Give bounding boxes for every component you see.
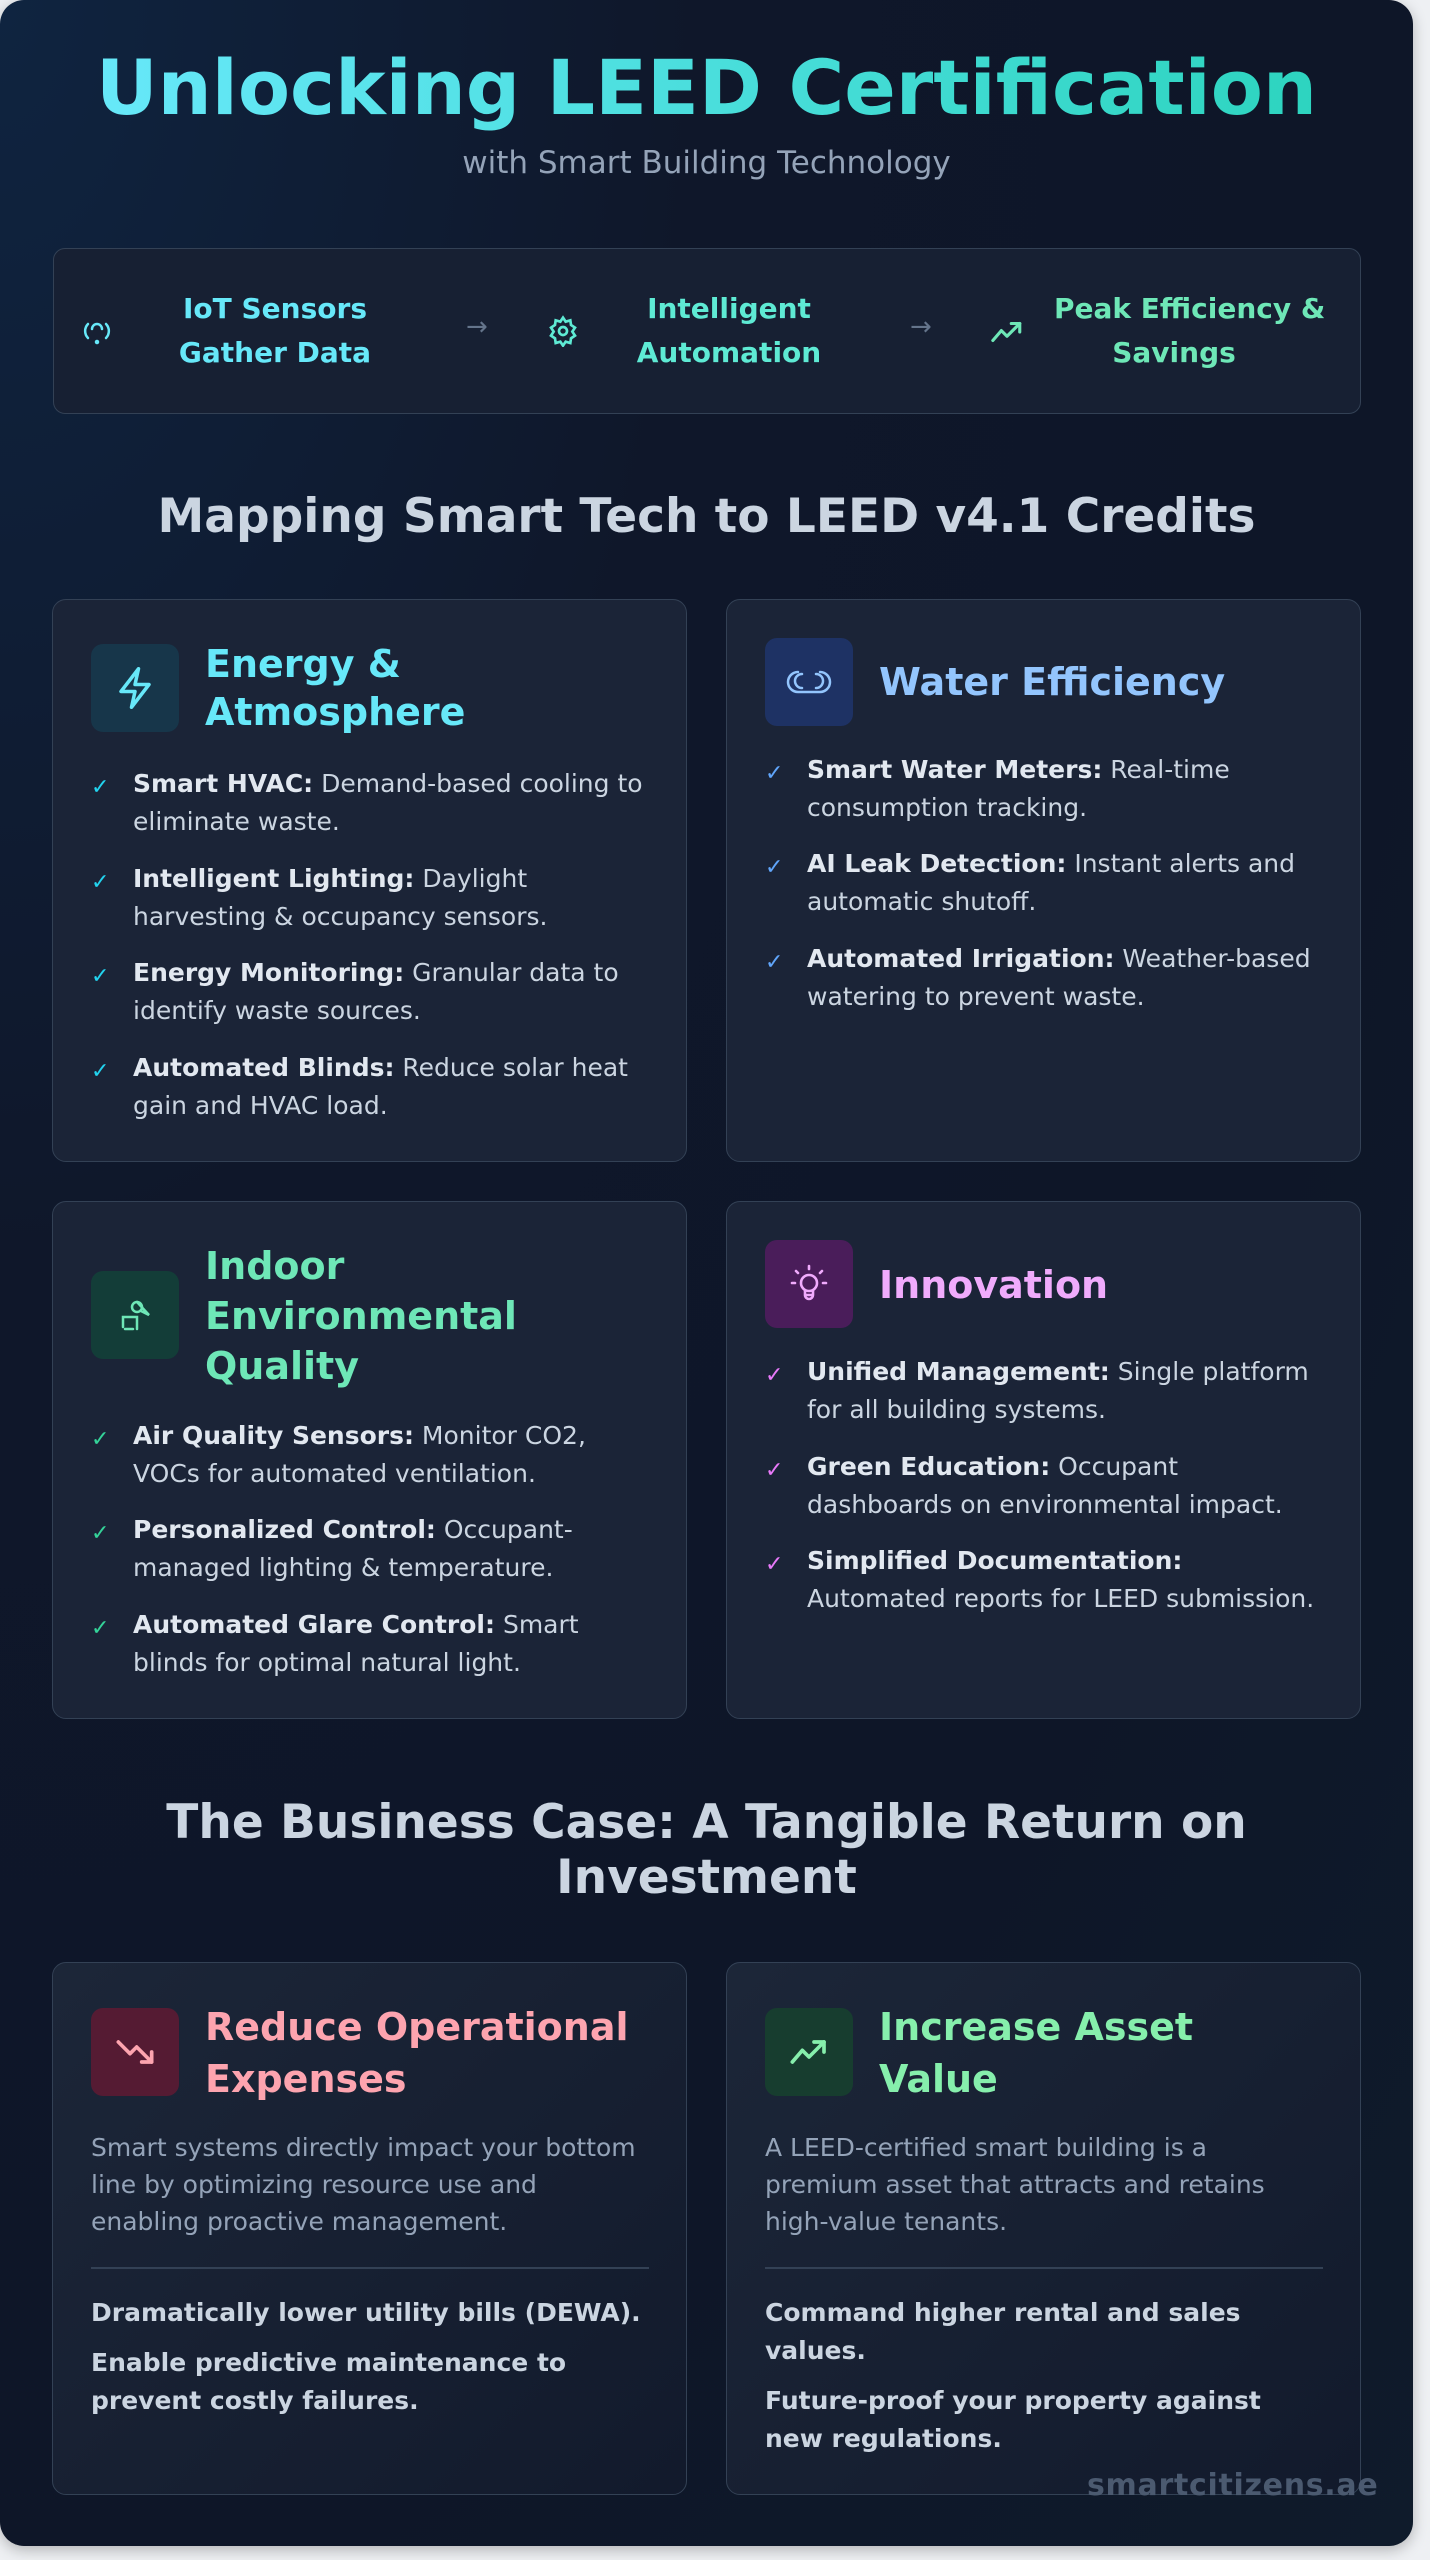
panel: energy: ✓ [91, 1059, 109, 1084]
increase title: Value [879, 2057, 998, 2101]
panel: energy: harvesting & occupancy sensors. [133, 902, 547, 931]
icon: gear [549, 315, 577, 347]
benefit [765, 2386, 1261, 2453]
panel: energy: ✓ [91, 775, 109, 800]
step 1 text: IoT Sensors [183, 292, 367, 325]
panel: water: consumption tracking. [807, 793, 1087, 822]
arrow 2: → [910, 312, 932, 342]
IEQ title: Environmental [205, 1294, 517, 1338]
heading: business case: The Business Case: A Tangible Return on [166, 1795, 1247, 1850]
panel: water: AI Leak Detection: Instant alerts and [807, 849, 1295, 878]
panel: energy: eliminate waste. [133, 807, 340, 836]
panel: IEQ: Personalized Control: Occupant- [133, 1515, 573, 1544]
description: line by optimizing resource use and [91, 2170, 537, 2199]
benefit: Future-proof your property against [765, 2386, 1261, 2415]
panel: IEQ: blinds for optimal natural light. [133, 1648, 521, 1677]
item [91, 1421, 586, 1488]
panel: water: Automated Irrigation: Weather-based [807, 944, 1311, 973]
step 2 text [636, 292, 821, 369]
panel: IEQ [52, 1201, 687, 1719]
step 2 text: Intelligent [647, 292, 811, 325]
panel: energy: identify waste sources. [133, 996, 421, 1025]
description [91, 2133, 636, 2236]
panel: water: ✓ [765, 855, 783, 880]
panel: water: ✓ [765, 761, 783, 786]
item [765, 1357, 1309, 1424]
item [765, 755, 1230, 822]
step 1 text [179, 292, 371, 369]
energy title: Atmosphere [205, 690, 465, 734]
panel: innovation: Automated reports for LEED submission. [807, 1584, 1314, 1613]
panel: IEQ: ✓ [91, 1521, 109, 1546]
panel: innovation: ✓ [765, 1552, 783, 1577]
panel: water: Smart Water Meters: Real-time [807, 755, 1230, 784]
panel: innovation: ✓ [765, 1363, 783, 1388]
panel: energy: Energy Monitoring: Granular data to [133, 958, 619, 987]
panel: energy: Automated Blinds: Reduce solar heat [133, 1053, 628, 1082]
benefit [91, 2348, 566, 2415]
step 3 text [1054, 292, 1325, 369]
step 3 text: Peak Efficiency & [1054, 292, 1325, 325]
description: high-value tenants. [765, 2207, 1007, 2236]
water title: Water Efficiency [879, 660, 1225, 704]
IEQ title: Indoor [205, 1244, 344, 1288]
benefit: Enable predictive maintenance to [91, 2348, 566, 2377]
panel: innovation: for all building systems. [807, 1395, 1106, 1424]
item [765, 1452, 1283, 1519]
benefit: new regulations. [765, 2424, 1002, 2453]
panel: energy: ✓ [91, 870, 109, 895]
step 1 text: Gather Data [179, 336, 371, 369]
panel: IEQ: ✓ [91, 1616, 109, 1641]
panel: water: ✓ [765, 950, 783, 975]
panel: energy: Smart HVAC: Demand-based cooling to [133, 769, 643, 798]
item [91, 1053, 628, 1120]
icon: person [91, 1271, 179, 1359]
benefit: Command higher rental and sales [765, 2298, 1241, 2327]
item [91, 769, 643, 836]
panel: innovation: Unified Management: Single platform [807, 1357, 1309, 1386]
watermark: smartcitizens.ae [1087, 2468, 1378, 2503]
arrow 1: → [466, 312, 488, 342]
icon: water [765, 638, 853, 726]
panel: IEQ: Air Quality Sensors: Monitor CO2, [133, 1421, 586, 1450]
icon: sensor [84, 322, 110, 344]
panel: innovation: Simplified Documentation: [807, 1546, 1182, 1575]
innovation title: Innovation [879, 1263, 1108, 1307]
icon: trend up [765, 2008, 853, 2096]
benefit: Dramatically lower utility bills (DEWA). [91, 2298, 641, 2327]
panel: innovation: dashboards on environmental impact. [807, 1490, 1283, 1519]
panel: IEQ: ✓ [91, 1427, 109, 1452]
reduce title [205, 2005, 628, 2101]
panel: water: watering to prevent waste. [807, 982, 1145, 1011]
item [91, 864, 547, 931]
heading: business case [166, 1795, 1247, 1905]
icon: bulb [765, 1240, 853, 1328]
item [765, 944, 1311, 1011]
panel: increase value [726, 1962, 1361, 2495]
reduce title: Reduce Operational [205, 2005, 628, 2049]
step 2 text: Automation [637, 336, 821, 369]
benefit: values. [765, 2336, 866, 2365]
item [765, 849, 1295, 916]
item [765, 1546, 1314, 1613]
description: A LEED-certified smart building is a [765, 2133, 1207, 2162]
panel: water [726, 599, 1361, 1162]
IEQ title: Quality [205, 1344, 359, 1388]
item [91, 1610, 579, 1677]
item [91, 1515, 573, 1582]
benefit: prevent costly failures. [91, 2386, 419, 2415]
panel: energy: ✓ [91, 964, 109, 989]
item [91, 958, 619, 1025]
icon: trend down [91, 2008, 179, 2096]
increase title: Increase Asset [879, 2005, 1193, 2049]
IEQ title [205, 1244, 517, 1388]
panel: energy [52, 599, 687, 1162]
panel: energy: Intelligent Lighting: Daylight [133, 864, 527, 893]
panel: energy: gain and HVAC load. [133, 1091, 388, 1120]
reduce title: Expenses [205, 2057, 407, 2101]
description: enabling proactive management. [91, 2207, 507, 2236]
panel: IEQ: managed lighting & temperature. [133, 1553, 553, 1582]
panel: innovation [726, 1201, 1361, 1719]
title: Unlocking LEED Certification [96, 43, 1317, 132]
panel: IEQ: VOCs for automated ventilation. [133, 1459, 536, 1488]
increase title [879, 2005, 1193, 2101]
heading: business case: Investment [556, 1850, 857, 1905]
energy title: Energy & [205, 642, 401, 686]
benefit [765, 2298, 1241, 2365]
icon: bolt [91, 644, 179, 732]
description: Smart systems directly impact your bottom [91, 2133, 636, 2162]
subtitle: with Smart Building Technology [462, 145, 951, 181]
panel: reduce expenses [52, 1962, 687, 2495]
description [765, 2133, 1265, 2236]
flow box [53, 248, 1361, 414]
panel: water: automatic shutoff. [807, 887, 1036, 916]
energy title [205, 642, 465, 734]
panel: innovation: Green Education: Occupant [807, 1452, 1178, 1481]
panel: innovation: ✓ [765, 1458, 783, 1483]
panel: IEQ: Automated Glare Control: Smart [133, 1610, 579, 1639]
step 3 text: Savings [1112, 336, 1236, 369]
description: premium asset that attracts and retains [765, 2170, 1265, 2199]
icon: trend up [991, 322, 1022, 342]
heading: mapping: Mapping Smart Tech to LEED v4.1 Credits [158, 489, 1255, 544]
